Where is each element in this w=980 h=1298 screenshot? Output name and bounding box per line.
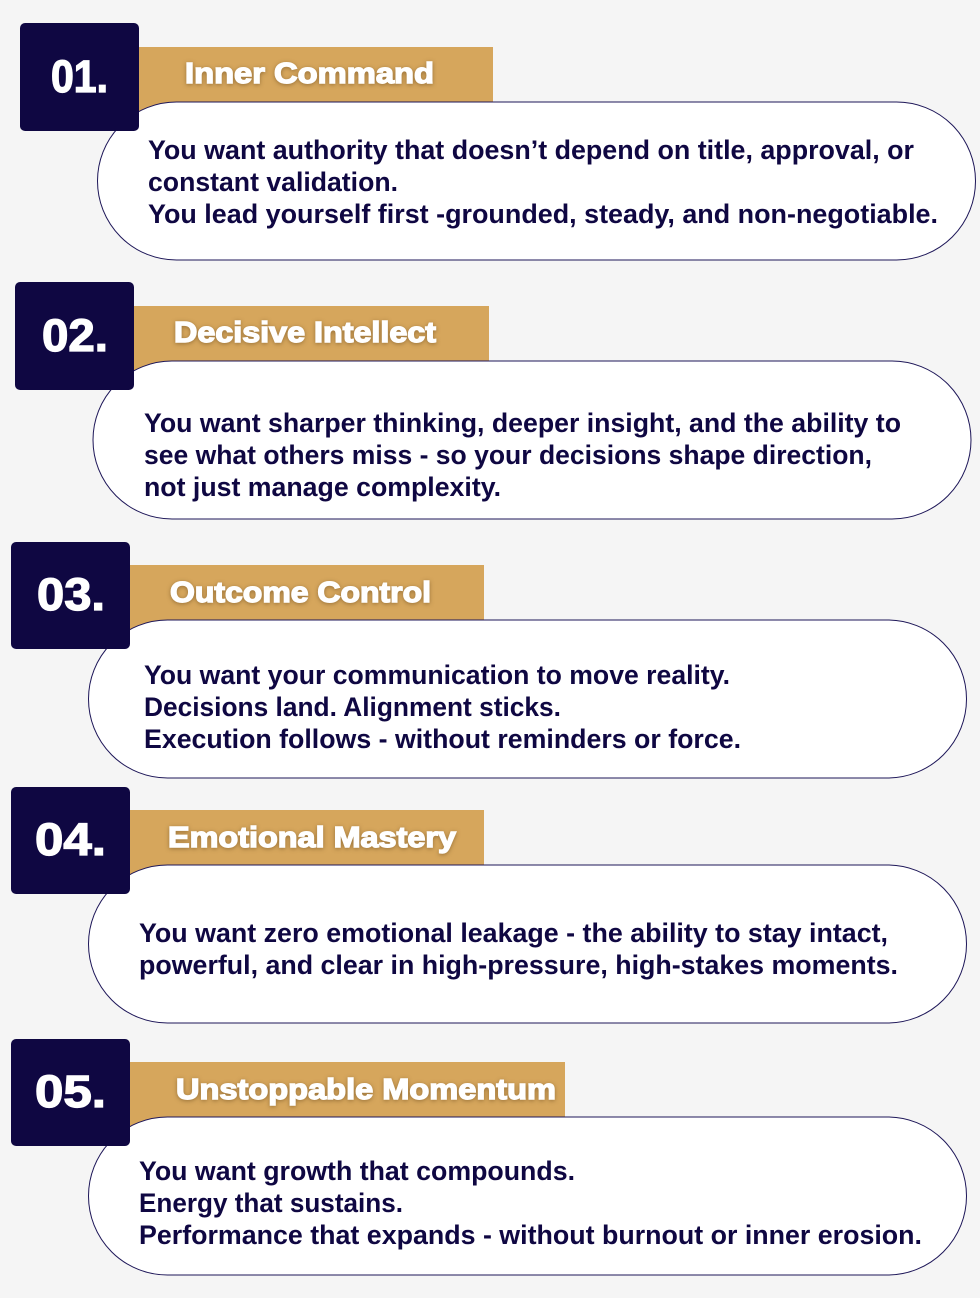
text card 05: You want growth that compounds. xyxy=(139,1156,575,1186)
number badge 04 xyxy=(11,787,130,894)
text card 01: You want authority that doesn’t depend on title, approval, or xyxy=(148,135,914,165)
panel: 04 Emotional Mastery xyxy=(11,787,966,1023)
number badge 02 xyxy=(15,282,134,390)
text card 05 xyxy=(88,1117,966,1275)
title banner: Emotional Mastery xyxy=(130,810,484,876)
number badge 03 xyxy=(11,542,130,649)
text card 02: see what others miss - so your decisions shape direction, xyxy=(144,440,872,470)
number badge 01: 01. xyxy=(51,51,108,102)
number badge 03: 03. xyxy=(37,569,105,620)
text card 05: Energy that sustains. xyxy=(139,1188,403,1218)
number badge 01 xyxy=(20,23,139,131)
text card 03 xyxy=(88,620,966,778)
panel: 05 Unstoppable Momentum xyxy=(11,1039,966,1275)
text card 03: You want your communication to move reality. xyxy=(144,660,730,690)
number badge 05 xyxy=(11,1039,130,1146)
text card 05: Performance that expands - without burnout or inner erosion. xyxy=(139,1220,922,1250)
text card 04 xyxy=(88,865,966,1023)
text card 02 xyxy=(93,361,971,519)
panel: 02 Decisive Intellect xyxy=(15,282,971,519)
title banner: Decisive Intellect: Decisive Intellect xyxy=(174,317,436,349)
title banner: Outcome Control xyxy=(130,565,484,631)
title banner: Emotional Mastery: Emotional Mastery xyxy=(168,822,456,854)
text card 03: Execution follows - without reminders or force. xyxy=(144,724,741,754)
title banner: Outcome Control: Outcome Control xyxy=(170,577,431,609)
text card 02: You want sharper thinking, deeper insight, and the ability to xyxy=(144,408,901,438)
title banner: Unstoppable Momentum xyxy=(130,1062,565,1128)
text card 01 xyxy=(98,102,976,260)
number badge 05: 05. xyxy=(35,1066,106,1117)
panel: 03 Outcome Control xyxy=(11,542,966,778)
title banner: Decisive Intellect xyxy=(134,306,489,372)
text card 01: constant validation. xyxy=(148,167,398,197)
title banner: Unstoppable Momentum: Unstoppable Momentum xyxy=(176,1074,556,1106)
text card 01: You lead yourself first -grounded, steady, and non-negotiable. xyxy=(148,199,938,229)
text card 02: not just manage complexity. xyxy=(144,472,501,502)
text card 03: Decisions land. Alignment sticks. xyxy=(144,692,561,722)
title banner: Inner Command xyxy=(139,47,493,113)
panel: 01 Inner Command xyxy=(20,23,976,260)
text card 04: powerful, and clear in high-pressure, high-stakes moments. xyxy=(139,950,898,980)
text card 04: You want zero emotional leakage - the ability to stay intact, xyxy=(139,918,888,948)
number badge 04: 04. xyxy=(35,814,106,865)
number badge 02: 02. xyxy=(42,310,108,361)
title banner: Inner Command: Inner Command xyxy=(185,58,434,90)
